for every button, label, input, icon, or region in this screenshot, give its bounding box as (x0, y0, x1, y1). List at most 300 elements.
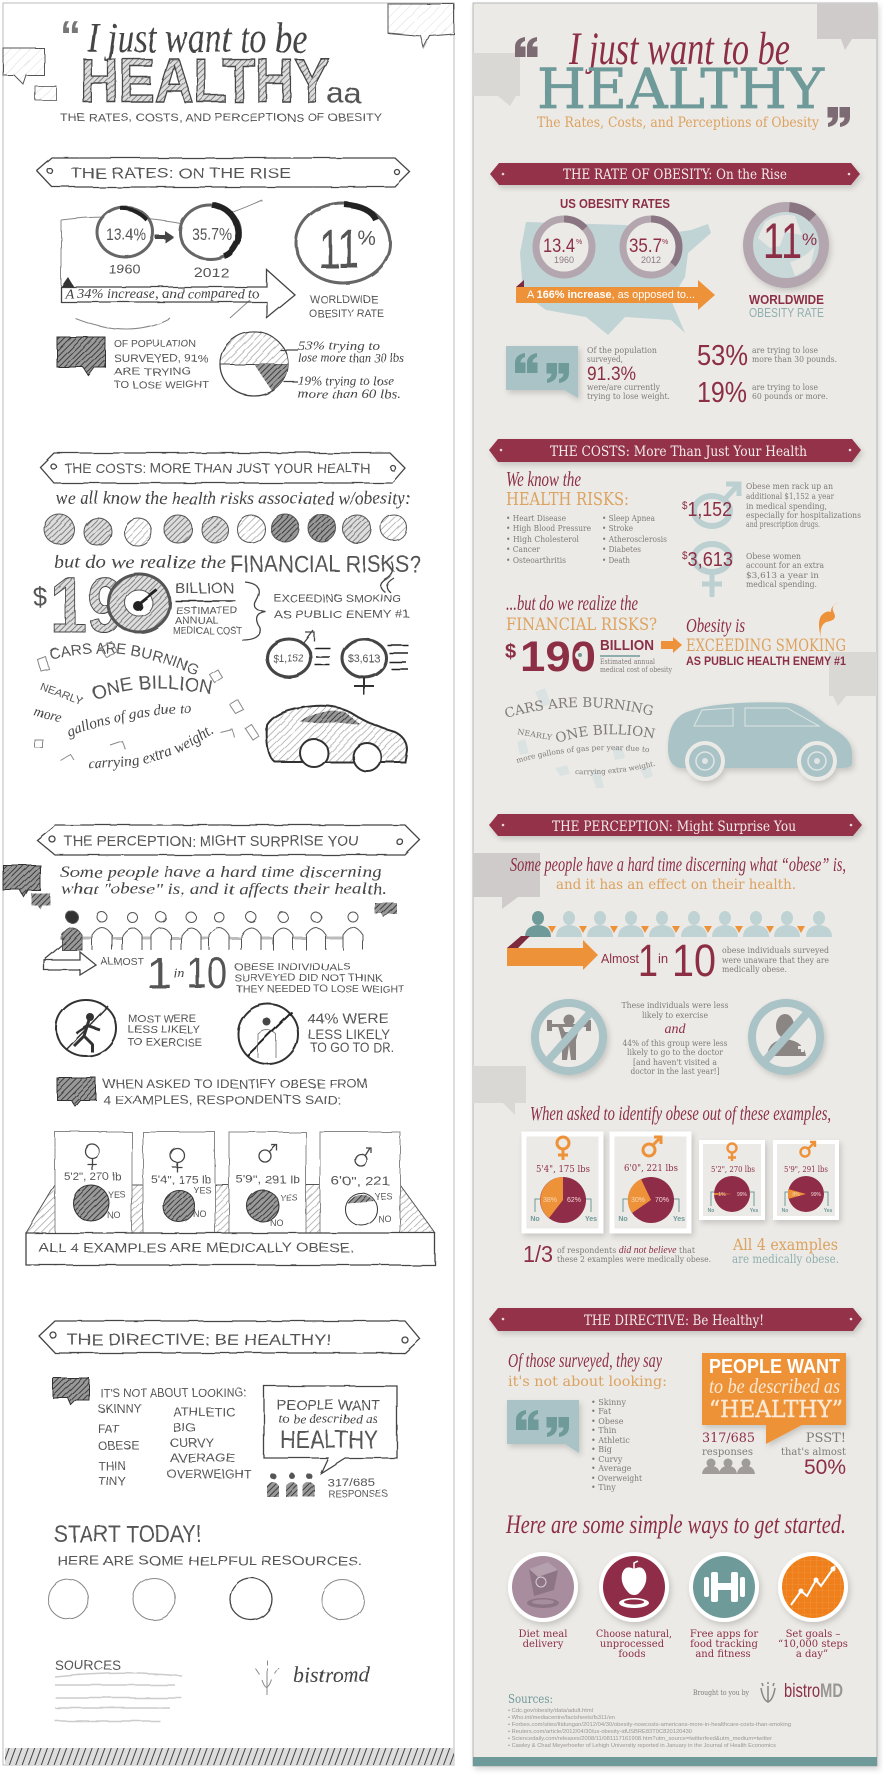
card: 6'0 221 lbs: 30% (631, 1197, 645, 1204)
text: women cost: Obese women (746, 552, 801, 561)
heading: US obesity rates: US OBESITY RATES (560, 196, 670, 211)
label: natural foods (596, 1629, 672, 1660)
sketch: identify text: 4 EXAMPLES, RESPONDENTS SAID: (103, 1093, 341, 1107)
sketch: 1 in 10: OBESE INDIVIDUALS (234, 962, 351, 973)
card: 5'4 175 lbs: 38% (543, 1197, 557, 1204)
sketch: four example cards: 6'0", 221 (331, 1174, 390, 1188)
text: one third did not believe: 1/3 (523, 1241, 553, 1267)
card: 5'4 175 lbs (524, 1134, 601, 1231)
sketch: 1 in 10: 1 (146, 949, 172, 998)
label: worldwide obesity rate (749, 292, 824, 320)
sources list: Sources: (508, 1692, 553, 1706)
text: women cost: medical spending. (746, 580, 817, 589)
sketch: gender costs (267, 630, 408, 695)
sketch: survey: ARE TRYING (114, 367, 192, 378)
list: descriptors: • Overweight (591, 1474, 643, 1483)
text: women cost (746, 552, 824, 589)
stat: PSST almost 50 percent (781, 1431, 846, 1479)
stat: 19 percent (697, 377, 828, 409)
stat: almost 1 in 10: obese individuals surveyed (722, 946, 829, 955)
card: 6'0 221 lbs: No (618, 1216, 628, 1223)
card: 5'9 291 lbs (775, 1142, 837, 1218)
label: worldwide obesity rate: WORLDWIDE (749, 292, 824, 307)
heading: hard time discerning: and it has an effect on their health. (556, 877, 796, 893)
sketch: 1 in 10: ALMOST (101, 957, 144, 968)
sketch: four example cards (26, 1132, 435, 1233)
label: natural foods: unprocessed (600, 1639, 665, 1650)
sketch: identify text (57, 1077, 368, 1107)
sketch: four example cards: NO (378, 1214, 392, 1224)
sketch banner: directive (39, 1321, 420, 1353)
text: all 4 examples: All 4 examples (732, 1235, 838, 1254)
ring: 11 percent worldwide (745, 204, 827, 286)
card: 5'2 270 lbs: 1% (718, 1192, 726, 1198)
icon and stat: women 3,613: 3,613 (688, 549, 733, 571)
text: women cost: account for an extra (746, 561, 824, 570)
sketch banner: rates: THE RATES: ON THE RISE (71, 165, 291, 182)
label: diet meal delivery (519, 1629, 567, 1650)
sketch: health risk text and dots: but do we realize the (54, 552, 226, 572)
sketch: gender costs: $1,152 (273, 653, 304, 665)
sketch: rates rings and arrow: 1960 (109, 262, 141, 277)
sources list: • Cdc.gov/obesity/data/adult.html (508, 1708, 593, 1714)
sketch: survey: 19% trying to lose (298, 373, 394, 388)
title block (473, 4, 877, 131)
logo: brought to you by bistroMD: bistroMD (784, 1681, 843, 1702)
text: women cost: $3,613 a year in (746, 571, 819, 580)
ring: 35.7 percent 2012 (623, 219, 679, 275)
list: descriptors: • Curvy (591, 1455, 623, 1464)
sketch: prohibition icons: LESS LIKELY (308, 1026, 391, 1042)
sketch: not about looking list: TINY (98, 1474, 125, 1488)
sketch: four example cards: YES (193, 1185, 211, 1195)
label: set goals (778, 1629, 848, 1660)
card: 5'9 291 lbs: 8% (792, 1192, 800, 1198)
icon: car (668, 702, 852, 781)
sketch: all four obese banner: ALL 4 EXAMPLES ARE MEDICALLY OBESE. (39, 1240, 354, 1255)
sketch header: I just want to be (87, 16, 307, 62)
sketch: perception text: Some people have a hard time discerning (60, 864, 382, 881)
sketch: 190 billion: ANNUAL (175, 616, 219, 627)
text: cars burning nearly one billion: ONE BILLION (556, 724, 656, 742)
sketch: 190 billion: AS PUBLIC ENEMY #1 (274, 609, 410, 621)
sketch: not about looking list (53, 1378, 252, 1488)
sketch: sources and logo (55, 1657, 371, 1721)
label: set goals: Set goals – (786, 1629, 840, 1640)
list: health risks: • Osteoarthritis (506, 556, 566, 565)
sketch: prohibition icons: 44% WERE (307, 1010, 389, 1026)
label: free apps: food tracking (690, 1639, 758, 1650)
sketch: prohibition icons: TO GO TO DR. (310, 1039, 394, 1055)
icon and stat: men 1,152: $ (682, 500, 687, 512)
sketch: perception text (3, 864, 397, 918)
label: natural foods: Choose natural, (596, 1629, 672, 1640)
text: less likely to exercise and go to doctor (622, 1001, 728, 1076)
list: health risks: • Diabetes (602, 545, 641, 554)
sketch: cars burning text: CARS ARE BURNING (50, 642, 198, 674)
sketch: 190 billion: $ (33, 582, 48, 612)
sketch: prohibition icons: LESS LIKELY (128, 1024, 201, 1036)
sketch: cars burning text (32, 640, 260, 771)
sources list: • Reuters.com/article/2012/04/30/us-obesity-idUSBRE83T0C820120430 (508, 1729, 692, 1735)
sketch: 1 in 10: in (174, 967, 185, 982)
banner: rate of obesity: THE RATE OF OBESITY: On the Rise (563, 167, 787, 183)
logo: brought to you by bistroMD: Brought to you by (693, 1688, 750, 1697)
label: worldwide obesity rate: OBESITY RATE (749, 305, 824, 320)
sketch: 190 billion (33, 561, 410, 649)
list: descriptors: • Obese (591, 1417, 624, 1426)
sketch: rates rings and arrow (61, 200, 390, 329)
icon and stat: men 1,152: 1,152 (687, 499, 732, 521)
heading: not about looking (508, 1350, 667, 1390)
arrow: to exceeding smoking (661, 637, 682, 653)
text: 91.3 percent: 91.3% (587, 364, 636, 385)
heading: health risks: HEALTH RISKS: (506, 489, 629, 510)
sketch: sources and logo: SOURCES (55, 1657, 121, 1673)
sketch: people want bubble: PEOPLE WANT (277, 1397, 380, 1414)
text: less likely to exercise and go to doctor: likely to exercise (642, 1011, 708, 1020)
card: 6'0 221 lbs: 70% (655, 1197, 669, 1204)
stat: 190 billion: BILLION (600, 637, 654, 654)
sketch: identify text: WHEN ASKED TO IDENTIFY OBESE FROM (103, 1077, 368, 1091)
sketch: survey: TO LOSE WEIGHT (114, 380, 209, 391)
sketch: rates rings and arrow: 13.4% (106, 225, 146, 244)
stat: 190 billion: Estimated annual (600, 658, 656, 666)
sketch: perception text: what "obese" is, and it affects their health. (61, 881, 387, 898)
sources list: • Forbes.com/sites/ltidungan/2012/04/30/obesity-nowcosts-americans-more-in-healthcare-costs-than-smoking (508, 1722, 791, 1728)
sketch: not about looking list: OVERWEIGHT (167, 1467, 252, 1481)
sketch: 190 billion: EXCEEDING SMOKING (274, 593, 401, 605)
sketch: 1 in 10: SURVEYED DID NOT THINK (234, 973, 382, 984)
ring: 13.4 percent 1960: 13.4 (543, 236, 575, 257)
label: diet meal delivery: Diet meal (519, 1629, 567, 1640)
sources list: • Cawley & Chad Meyerhoefer of Lehigh University reported in January in the Journal of Health Economics (508, 1743, 776, 1749)
stat: almost 1 in 10 (601, 935, 829, 986)
sources list: • Who.int/mediacentre/factsheets/fs311/en (508, 1715, 615, 1721)
sketch: ten people (60, 911, 363, 950)
label: diet meal delivery: delivery (523, 1639, 564, 1650)
ring: 11 percent worldwide: 11 (763, 213, 802, 269)
sketch: rates rings and arrow: 35.7% (192, 225, 232, 244)
stat: 190 billion: $ (505, 641, 516, 663)
sketch: survey: SURVEYED, 91% (114, 353, 208, 365)
sketch: survey: more than 60 lbs. (298, 386, 401, 401)
card: 5'2 270 lbs: 99% (737, 1192, 748, 1198)
callout: people want healthy: PEOPLE WANT (709, 1356, 840, 1378)
ring: 11 percent worldwide: % (802, 230, 817, 249)
sketch banner: costs: THE COSTS: MORE THAN JUST YOUR HEALTH (64, 460, 370, 476)
sketch: start today: START TODAY! (54, 1521, 202, 1548)
stat: almost 1 in 10: 1 (638, 935, 658, 986)
sources list: • Sciencedaily.com/releases/2008/11/081117161908.htm?utm_source=twitterfeed&utm_medium=twitter (508, 1736, 772, 1742)
card: 5'2 270 lbs: No (708, 1208, 714, 1214)
panel: pencil sketch (2, 2, 455, 1766)
list: health risks: • Stroke (602, 524, 633, 533)
sketch: people want bubble: 317/685 (327, 1477, 375, 1489)
sketch: rates rings and arrow: 11 (318, 217, 360, 280)
sketch: prohibition icons: MOST WERE (128, 1013, 196, 1025)
sketch: health risk text and dots (44, 488, 421, 578)
sketch: people want bubble: HEALTHY (280, 1426, 378, 1454)
ring: 13.4 percent 1960: 1960 (554, 255, 574, 265)
sketch: four example cards: 5'4", 175 lb (151, 1174, 211, 1186)
stat: almost 1 in 10: medically obese. (722, 965, 787, 974)
stat: 317 of 685 responses: responses (702, 1447, 753, 1458)
sketch: not about looking list: AVERAGE (170, 1451, 235, 1465)
banner: rate of obesity (490, 163, 860, 185)
text: men cost: Obese men rack up an (746, 482, 833, 491)
icon: fitness apps dumbbell (689, 1552, 759, 1622)
card: 5'9 291 lbs: 99% (811, 1192, 822, 1198)
heading: health risks (506, 467, 629, 510)
sketch: not about looking list: ATHLETIC (173, 1405, 235, 1419)
heading: health risks: We know the (506, 467, 581, 491)
card: 5'4 175 lbs: 62% (567, 1197, 581, 1204)
text: obesity exceeding smoking (686, 602, 877, 706)
card: 5'9 291 lbs: No (782, 1208, 788, 1214)
stat: 19 percent: are trying to lose (752, 383, 818, 392)
text: men cost: especially for hospitalizations (746, 511, 861, 520)
text: one third did not believe (523, 1241, 711, 1267)
sketch: car (267, 706, 407, 771)
label: free apps: Free apps for (690, 1629, 758, 1640)
card: 5'4 175 lbs: 5'4", 175 lbs (536, 1164, 590, 1175)
sketch: 190 billion: ESTIMATED (176, 606, 238, 617)
title block: HEALTHY (537, 57, 825, 121)
sketch banner: perception: THE PERCEPTION: MIGHT SURPRISE YOU (64, 833, 359, 850)
list: descriptors: • Athletic (591, 1436, 630, 1445)
stat: PSST almost 50 percent: that's almost (781, 1447, 846, 1458)
ring: 35.7 percent 2012: 35.7 (629, 236, 662, 257)
sketch: health risk text and dots: we all know the health risks associated w/obesity: (56, 488, 411, 508)
sketch: cars burning text: carrying extra weight. (89, 727, 214, 771)
speech bubble: decorative perception (473, 853, 540, 909)
sketch: rates rings and arrow: % (358, 228, 376, 250)
text: less likely to exercise and go to doctor: doctor in the last year!] (630, 1067, 720, 1076)
icon and stat: men 1,152 (682, 484, 739, 526)
callout: people want healthy: to be described as (709, 1374, 840, 1398)
sketch: cars burning text: NEARLY (39, 682, 84, 708)
card: 5'2 270 lbs (701, 1142, 763, 1218)
text: men cost: in medical spending, (746, 502, 827, 511)
text: less likely to exercise and go to doctor: and (664, 1022, 686, 1037)
heading: financial risks: FINANCIAL RISKS? (506, 615, 657, 635)
sketch: prohibition icons: TO EXERCISE (128, 1037, 202, 1049)
panel: finished design (472, 2, 882, 1772)
heading: not about looking: it's not about looking: (508, 1374, 667, 1390)
sources list (508, 1692, 791, 1749)
text: all 4 examples (732, 1235, 839, 1266)
text: men cost (746, 482, 861, 529)
sketch: four example cards: YES (108, 1190, 126, 1200)
list: health risks: • Sleep Apnea (602, 514, 655, 523)
list: descriptors (591, 1398, 643, 1492)
list: descriptors: • Average (591, 1464, 632, 1473)
stat: PSST almost 50 percent: PSST! (806, 1431, 846, 1446)
text: 91.3 percent (587, 346, 670, 401)
card: 6'0 221 lbs (612, 1134, 689, 1231)
list: health risks: • Cancer (506, 545, 540, 554)
sketch: bottom hatched band (5, 1748, 454, 1765)
icon: no exercise (535, 1003, 603, 1071)
sketch: cars burning text: more (32, 704, 63, 726)
card: 5'2 270 lbs: Yes (750, 1208, 759, 1214)
icon: natural foods (599, 1552, 669, 1622)
banner: the costs (489, 439, 861, 462)
banner: the costs: THE COSTS: More Than Just Your Health (550, 444, 807, 460)
sketch banner: costs (40, 453, 405, 483)
sketch: cars burning text: ONE BILLION (92, 675, 212, 699)
list: health risks: • Atherosclerosis (602, 535, 667, 544)
title block: The Rates, Costs, and Perceptions of Obesity (537, 115, 819, 131)
sketch: sources and logo: bistromd (293, 1662, 371, 1687)
heading: financial risks: ...but do we realize the (506, 591, 638, 615)
text: men cost: and prescription drugs. (746, 520, 820, 529)
arrow: one in ten (507, 936, 598, 970)
sketch: four example cards: 5'9", 291 lb (236, 1174, 300, 1186)
people row: one in ten (525, 911, 832, 937)
sketch: 1 in 10: THEY NEEDED TO LOSE WEIGHT (236, 984, 404, 995)
sketch header: “ (60, 12, 81, 59)
sketch: people want bubble: to be described as (279, 1411, 378, 1426)
list: descriptors: • Skinny (591, 1398, 626, 1407)
text: 91.3 percent: Of the population (587, 346, 657, 355)
sketch: people want bubble: RESPONSES (328, 1489, 388, 1500)
stat: almost 1 in 10: 10 (672, 935, 716, 986)
stat: 19 percent: 19% (697, 377, 747, 409)
text: 91.3 percent: were/are currently (587, 383, 660, 392)
label: set goals: “10,000 steps (778, 1639, 848, 1650)
sketch: prohibition icons (56, 1000, 394, 1064)
text: less likely to exercise and go to doctor: likely to go to the doctor (627, 1048, 723, 1057)
text: less likely to exercise and go to doctor: 44% of this group were less (622, 1039, 728, 1048)
sketch banner: directive: THE DIRECTIVE: BE HEALTHY! (67, 1332, 331, 1349)
list: health risks: • Heart Disease (506, 514, 566, 523)
list: descriptors: • Big (591, 1445, 612, 1454)
list: health risks (506, 514, 667, 565)
sketch: not about looking list: SKINNY (98, 1402, 142, 1416)
sketch: people want bubble (264, 1386, 397, 1500)
arrow: 166 percent increase: A 166% increase, as opposed to... (527, 289, 695, 301)
stat: 190 billion (505, 633, 672, 681)
sketch: rates rings and arrow: OBESITY RATE (309, 308, 384, 320)
label: natural foods: foods (618, 1649, 646, 1660)
sketch: 1 in 10: 10 (187, 949, 227, 998)
text: men cost: additional $1,152 a year (746, 492, 834, 501)
list: health risks: • High Cholesterol (506, 535, 579, 544)
icon: no doctor (752, 1003, 820, 1071)
logo: brought to you by bistroMD (693, 1681, 843, 1702)
stat: 53 percent (697, 340, 837, 372)
text: 91.3 percent: surveyed, (587, 355, 623, 364)
banner: the perception: THE PERCEPTION: Might Surprise You (552, 819, 796, 835)
sketch: rates rings and arrow: WORLDWIDE (310, 294, 378, 306)
text: cars burning nearly one billion: NEARLY (517, 727, 554, 742)
heading: not about looking: Of those surveyed, they say (508, 1350, 662, 1372)
card: 5'4 175 lbs: Yes (585, 1216, 597, 1223)
sketch banner: rates (37, 158, 410, 187)
card: 5'4 175 lbs: No (530, 1216, 540, 1223)
sketch: health risk text and dots: FINANCIAL RISKS? (230, 551, 421, 578)
label: free apps: and fitness (695, 1649, 751, 1660)
sketch content (2, 3, 455, 1722)
icon: goals chart (778, 1552, 848, 1622)
sketch: four example cards: YES (280, 1193, 298, 1203)
ring: 13.4 percent 1960 (536, 219, 592, 275)
text: obesity exceeding smoking: Obesity is (686, 615, 745, 637)
banner: the directive: THE DIRECTIVE: Be Healthy! (584, 1313, 764, 1329)
sketch: not about looking list: OBESE (98, 1439, 140, 1453)
label: free apps (690, 1629, 758, 1660)
stat: 53 percent: are trying to lose (752, 346, 818, 355)
sketch: start today: HERE ARE SOME HELPFUL RESOURCES. (57, 1553, 362, 1568)
sketch: 190 billion: 19 (50, 561, 124, 649)
card: 5'2 270 lbs: 5'2", 270 lbs (711, 1165, 755, 1174)
sketch: 190 billion: BILLION (175, 580, 234, 597)
ring: 35.7 percent 2012: 2012 (641, 255, 661, 265)
sketch header: THE RATES, COSTS, AND PERCEPTIONS OF OBESITY (60, 112, 383, 124)
callout: people want healthy: “HEALTHY” (709, 1397, 843, 1423)
sketch: four example cards: NO (193, 1209, 206, 1219)
banner: the directive (489, 1308, 862, 1331)
stat: 19 percent: 60 pounds or more. (752, 392, 828, 401)
sketch: all four obese banner (26, 1233, 435, 1265)
footer bar (473, 1757, 877, 1766)
sketch: survey (57, 332, 404, 401)
sketch: not about looking list: FAT (98, 1422, 120, 1436)
text: all 4 examples: are medically obese. (732, 1252, 839, 1266)
sketch header: aa (327, 77, 361, 110)
quote bubble: survey (506, 346, 578, 398)
icon: diet meal delivery (508, 1552, 578, 1622)
stat: PSST almost 50 percent: 50% (804, 1456, 846, 1479)
heading: hard time discerning (510, 854, 846, 893)
text: cars burning nearly one billion: CARS ARE BURNING (505, 697, 653, 717)
text: cars burning nearly one billion (505, 688, 656, 788)
ring: 35.7 percent 2012: % (662, 239, 668, 246)
card: 6'0 221 lbs: 6'0", 221 lbs (624, 1163, 678, 1174)
sketch header: HEALTHY (80, 47, 330, 116)
text: 91.3 percent: trying to lose weight. (587, 392, 670, 401)
sketch banner: perception (37, 825, 420, 855)
sketch: not about looking list: CURVY (170, 1436, 214, 1450)
text: one third did not believe: of respondents did not believe that (557, 1245, 696, 1256)
sketch header (3, 4, 454, 124)
text: cars burning nearly one billion: more gallons of gas per year due to (516, 744, 649, 763)
sketch: rates rings and arrow: A 34% increase, and compared to (64, 287, 259, 302)
list: health risks: • High Blood Pressure (506, 524, 591, 533)
sketch: not about looking list: BIG (173, 1421, 196, 1435)
sketch: start today (48, 1521, 364, 1620)
icon and stat: women 3,613 (682, 544, 733, 597)
text: less likely to exercise and go to doctor: [and haven't visited a (633, 1058, 717, 1067)
icon and stat: women 3,613: $ (682, 550, 688, 562)
stat: 317 of 685 responses (702, 1431, 755, 1474)
text: obesity exceeding smoking: AS PUBLIC HEALTH ENEMY #1 (686, 654, 846, 668)
list: health risks: • Death (602, 556, 630, 565)
sketch: survey: OF POPULATION (114, 339, 196, 350)
stat: almost 1 in 10: in (658, 951, 668, 966)
text: less likely to exercise and go to doctor: These individuals were less (622, 1001, 728, 1010)
callout: people want healthy (702, 1353, 846, 1444)
stat: almost 1 in 10: Almost (601, 951, 639, 966)
quote bubble: list (507, 1400, 579, 1453)
title block: I just want to be (568, 23, 790, 75)
stat: 317 of 685 responses: 317/685 (702, 1431, 755, 1446)
sketch: 1 in 10 (44, 945, 404, 998)
stat: 53 percent: 53% (697, 340, 748, 372)
sketch: cars burning text: gallons of gas due to (68, 704, 191, 740)
